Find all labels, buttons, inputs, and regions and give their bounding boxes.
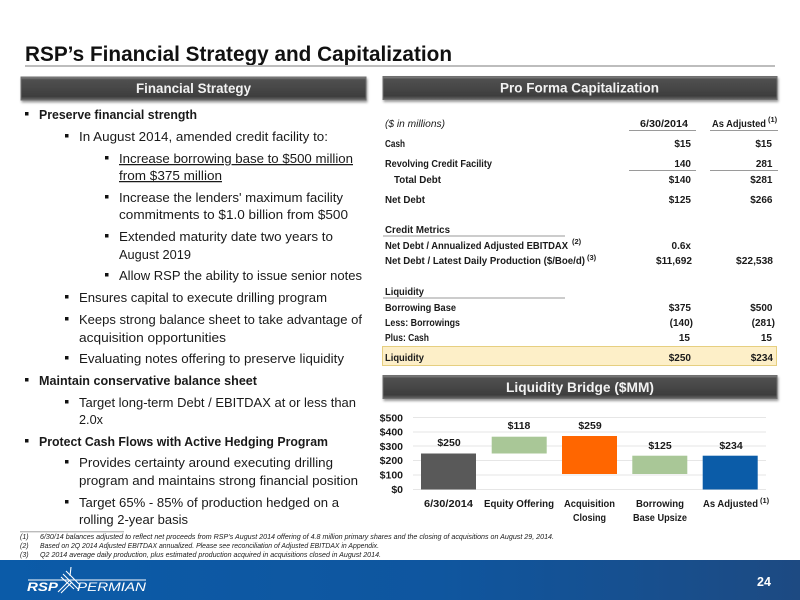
bullet list: financial strategy: 2.0x: [79, 413, 104, 427]
table: capitalization: (3): [587, 253, 597, 262]
table: capitalization: (140): [670, 318, 693, 329]
logo: RSP Permian: RSP: [27, 582, 58, 594]
bullet list: financial strategy: August 2019: [119, 248, 191, 262]
title: RSP’s Financial Strategy and Capitalization: [25, 43, 452, 66]
table: capitalization: Cash: [385, 139, 405, 150]
table: capitalization: $125: [669, 195, 691, 206]
value labels: $118: [508, 420, 531, 432]
y axis labels: $400: [380, 426, 403, 438]
table: capitalization: $140: [669, 175, 691, 186]
table: capitalization: [382, 115, 778, 366]
y axis labels: $0: [391, 484, 403, 496]
bullet list: financial strategy: Evaluating notes offering to preserve liquidity: [79, 352, 345, 366]
bullet list: financial strategy: Preserve financial strength: [39, 108, 197, 122]
highlighted row: liquidity total: [382, 346, 776, 366]
table: capitalization: As Adjusted: [712, 119, 766, 130]
heading: liquidity bridge: Liquidity Bridge ($MM): [506, 380, 654, 395]
table: capitalization: (1): [768, 115, 778, 124]
bullet list: financial strategy: Allow RSP the ability to issue senior notes: [119, 269, 362, 283]
chart: liquidity bridge waterfall: [380, 412, 770, 524]
bullet list: financial strategy: acquisition opportunities: [79, 331, 226, 345]
table: capitalization: Net Debt / Annualized Adjusted EBITDAX: [385, 241, 568, 252]
table: capitalization: (2): [572, 237, 582, 246]
category labels: (1): [760, 496, 770, 505]
bullet list: financial strategy: from $375 million: [119, 169, 222, 183]
bullet list: financial strategy: Protect Cash Flows with Active Hedging Program: [39, 435, 328, 449]
table: capitalization: Less: Borrowings: [385, 318, 460, 329]
y axis labels: $200: [380, 455, 403, 467]
highlighted row: liquidity total: Liquidity: [385, 353, 424, 364]
category labels: Equity Offering: [484, 498, 554, 510]
panel: financial strategy: [21, 77, 366, 527]
category labels: Acquisition: [564, 498, 615, 510]
bullet list: financial strategy: commitments to $1.0 billion from $500: [119, 208, 348, 222]
table: capitalization: Credit Metrics: [385, 225, 450, 236]
table: capitalization: 0.6x: [672, 241, 691, 252]
table: capitalization: Net Debt: [385, 195, 426, 206]
value labels: $259: [578, 420, 602, 432]
table: capitalization: Net Debt / Latest Daily Production ($/Boe/d): [385, 256, 585, 267]
footnotes: Based on 2Q 2014 Adjusted EBITDAX annualized. Please see reconciliation of Adjusted EBITDAX in Appendix.: [40, 543, 379, 550]
table: capitalization: Total Debt: [394, 175, 442, 186]
bullet list: financial strategy: Increase the lenders' maximum facility: [119, 191, 344, 205]
table: capitalization: ($ in millions): [385, 119, 445, 130]
table: capitalization: $375: [669, 303, 691, 314]
table: capitalization: $281: [750, 175, 773, 186]
footer bar: [0, 560, 800, 600]
table: capitalization: 6/30/2014: [640, 119, 688, 130]
bullet list: financial strategy: Extended maturity date two years to: [119, 230, 333, 244]
bullet list: financial strategy: Keeps strong balance sheet to take advantage of: [79, 313, 363, 327]
bullet list: financial strategy: Provides certainty around executing drilling: [79, 456, 333, 470]
table: capitalization: (281): [752, 318, 775, 329]
bars: [421, 436, 758, 490]
bullet list: financial strategy: program and maintains strong financial position: [79, 474, 358, 488]
heading: liquidity bridge: [383, 376, 777, 398]
logo: RSP Permian: [27, 567, 147, 594]
heading: pro forma capitalization: Pro Forma Capitalization: [500, 80, 659, 96]
table: capitalization: Plus: Cash: [385, 333, 429, 344]
logo: RSP Permian: PERMIAN: [77, 582, 147, 594]
bullet list: financial strategy: Maintain conservative balance sheet: [39, 374, 258, 388]
table: capitalization: 281: [756, 159, 773, 170]
heading: pro forma capitalization: [383, 76, 777, 100]
y axis labels: $100: [380, 470, 403, 482]
panel: pro forma capitalization: [382, 76, 778, 366]
footnotes: (2): [20, 543, 29, 550]
y axis labels: $500: [380, 412, 403, 424]
y axis labels: [380, 412, 403, 496]
table: capitalization: $11,692: [656, 256, 692, 267]
table: capitalization: $15: [674, 139, 691, 150]
y axis labels: $300: [380, 441, 403, 453]
heading: financial strategy: [21, 77, 366, 100]
value labels: $125: [648, 440, 672, 452]
table: capitalization: $15: [755, 139, 772, 150]
value labels: [437, 420, 743, 452]
footnotes: 6/30/14 balances adjusted to reflect net proceeds from RSP’s August 2014 offering of 4.8 million primary shares and the closing of acquisitions on August 29, 2014.: [40, 534, 554, 541]
table: capitalization: 15: [679, 333, 690, 344]
value labels: $250: [437, 437, 461, 449]
highlighted row: liquidity total: $234: [751, 353, 773, 364]
category labels: Base Upsize: [633, 512, 687, 524]
table: capitalization: $266: [750, 195, 773, 206]
table: capitalization: 140: [674, 159, 691, 170]
category labels: 6/30/2014: [424, 498, 473, 510]
bullet list: financial strategy: Target 65% - 85% of production hedged on a: [79, 496, 339, 510]
table: capitalization: Liquidity: [385, 287, 424, 298]
category labels: Borrowing: [636, 498, 684, 510]
footnotes: (3): [20, 552, 29, 559]
highlighted row: liquidity total: $250: [669, 353, 691, 364]
heading: financial strategy: Financial Strategy: [136, 81, 251, 96]
bullet list: financial strategy: Increase borrowing base to $500 million: [119, 152, 353, 166]
table: capitalization: $500: [750, 303, 773, 314]
bullet list: financial strategy: In August 2014, amended credit facility to:: [79, 130, 328, 144]
category labels: As Adjusted: [703, 498, 758, 510]
bullet list: financial strategy: Ensures capital to execute drilling program: [79, 291, 327, 305]
footnotes: Q2 2014 average daily production, plus estimated production acquired in acquisitions closed in August 2014.: [40, 552, 381, 559]
bullet list: financial strategy: rolling 2-year basis: [79, 513, 188, 527]
panel: liquidity bridge: [380, 376, 777, 524]
table: capitalization: Borrowing Base: [385, 303, 456, 314]
footnotes: [20, 532, 554, 559]
category labels: Closing: [573, 512, 606, 524]
footnotes: (1): [20, 534, 29, 541]
value labels: $234: [719, 440, 743, 452]
bullet list: financial strategy: Target long-term Debt / EBITDAX at or less than: [79, 396, 356, 410]
bullet list: financial strategy: [25, 108, 363, 527]
table: capitalization: 15: [761, 333, 772, 344]
table: capitalization: $22,538: [736, 256, 773, 267]
table: capitalization: Revolving Credit Facility: [385, 159, 492, 170]
page number: 24: [757, 575, 771, 589]
category labels: [424, 496, 770, 524]
